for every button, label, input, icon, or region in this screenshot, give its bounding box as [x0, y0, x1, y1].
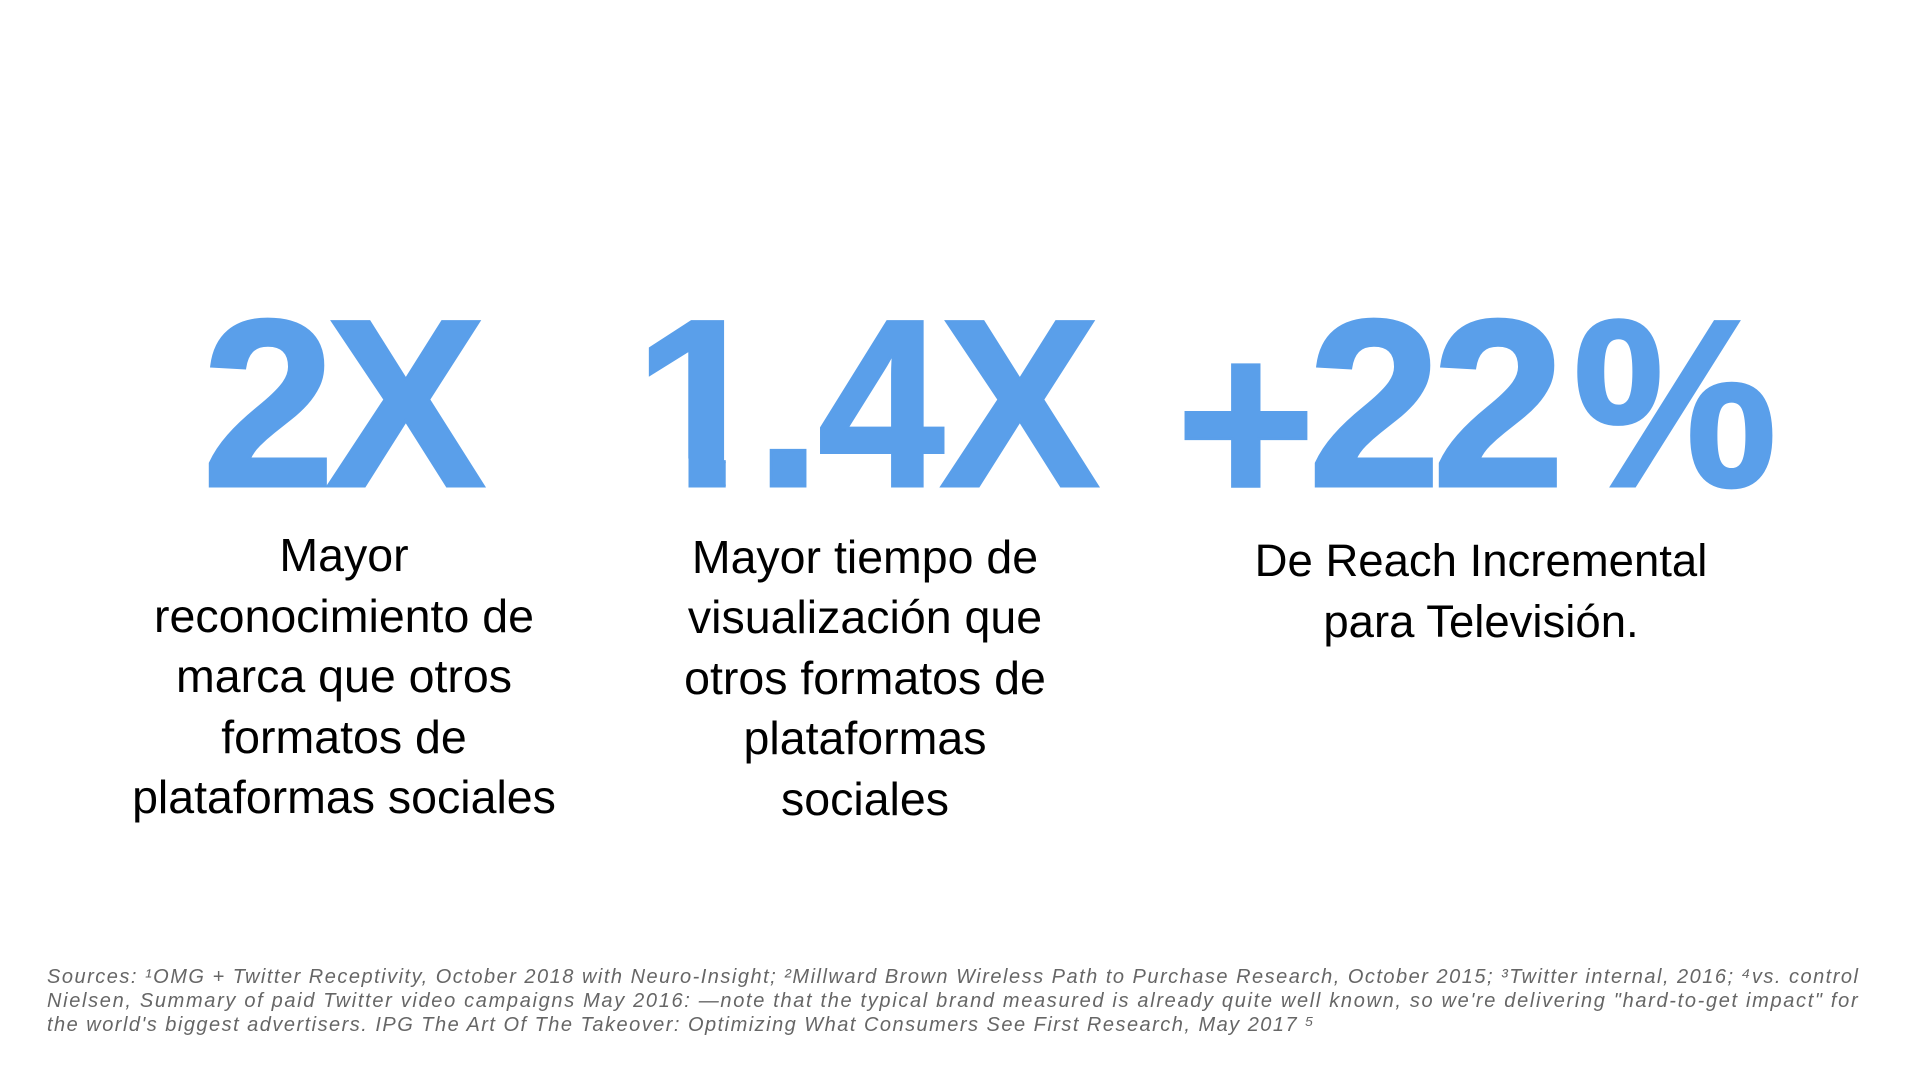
- stat description: brand recognition: marca que otros: [176, 650, 512, 702]
- stat description: viewing time: Mayor tiempo de: [692, 530, 1038, 582]
- stat: 1.4X: 1: [634, 270, 767, 537]
- stat: 1.4X: .: [755, 270, 821, 537]
- stat: 2X: 2: [202, 270, 335, 537]
- footnote: sources: Nielsen, Summary of paid Twitter video campaigns May 2016: —note that the typical brand measured is already quite well known, so we're delivering "hard-to-get impact" for: [47, 990, 1859, 1012]
- stat: +22%: 2: [1308, 270, 1441, 537]
- stat: 2X: [202, 270, 486, 537]
- stat description: brand recognition: formatos de: [221, 710, 467, 762]
- stat: 1.4X: [648, 270, 1100, 537]
- stat: +22%: +: [1176, 289, 1316, 556]
- stat description: viewing time: visualización que: [688, 591, 1042, 643]
- footnote: sources: [47, 966, 1859, 1036]
- stat description: brand recognition: [132, 529, 556, 823]
- stat description: incremental reach: [1255, 535, 1707, 646]
- stat: +22%: [1176, 270, 1777, 556]
- stat description: incremental reach: para Televisión.: [1323, 596, 1639, 646]
- stat description: viewing time: [684, 530, 1046, 824]
- stat description: brand recognition: reconocimiento de: [154, 590, 534, 642]
- stat: +22%: 2: [1432, 270, 1565, 537]
- stat description: brand recognition: Mayor: [279, 529, 409, 581]
- stat: 1.4X: 4: [818, 270, 944, 537]
- stat description: viewing time: sociales: [781, 772, 949, 824]
- footnote: sources: Sources: ¹OMG + Twitter Receptivity, October 2018 with Neuro-Insight; ²Millward Brown Wireless Path to Purchase Research, October 2015; ³Twitter internal, 2016; ⁴vs. control: [47, 966, 1859, 988]
- stat: +22%: %: [1573, 270, 1777, 537]
- stat description: viewing time: plataformas: [744, 712, 986, 764]
- stat description: viewing time: otros formatos de: [684, 652, 1046, 704]
- footnote: sources: the world's biggest advertisers. IPG The Art Of The Takeover: Optimizing What Consumers See First Research, May 2017 ⁵: [47, 1014, 1315, 1036]
- stat description: incremental reach: De Reach Incremental: [1255, 535, 1707, 586]
- stat description: brand recognition: plataformas sociales: [132, 771, 556, 823]
- stat: 2X: X: [326, 270, 485, 537]
- stat: 1.4X: X: [940, 270, 1099, 537]
